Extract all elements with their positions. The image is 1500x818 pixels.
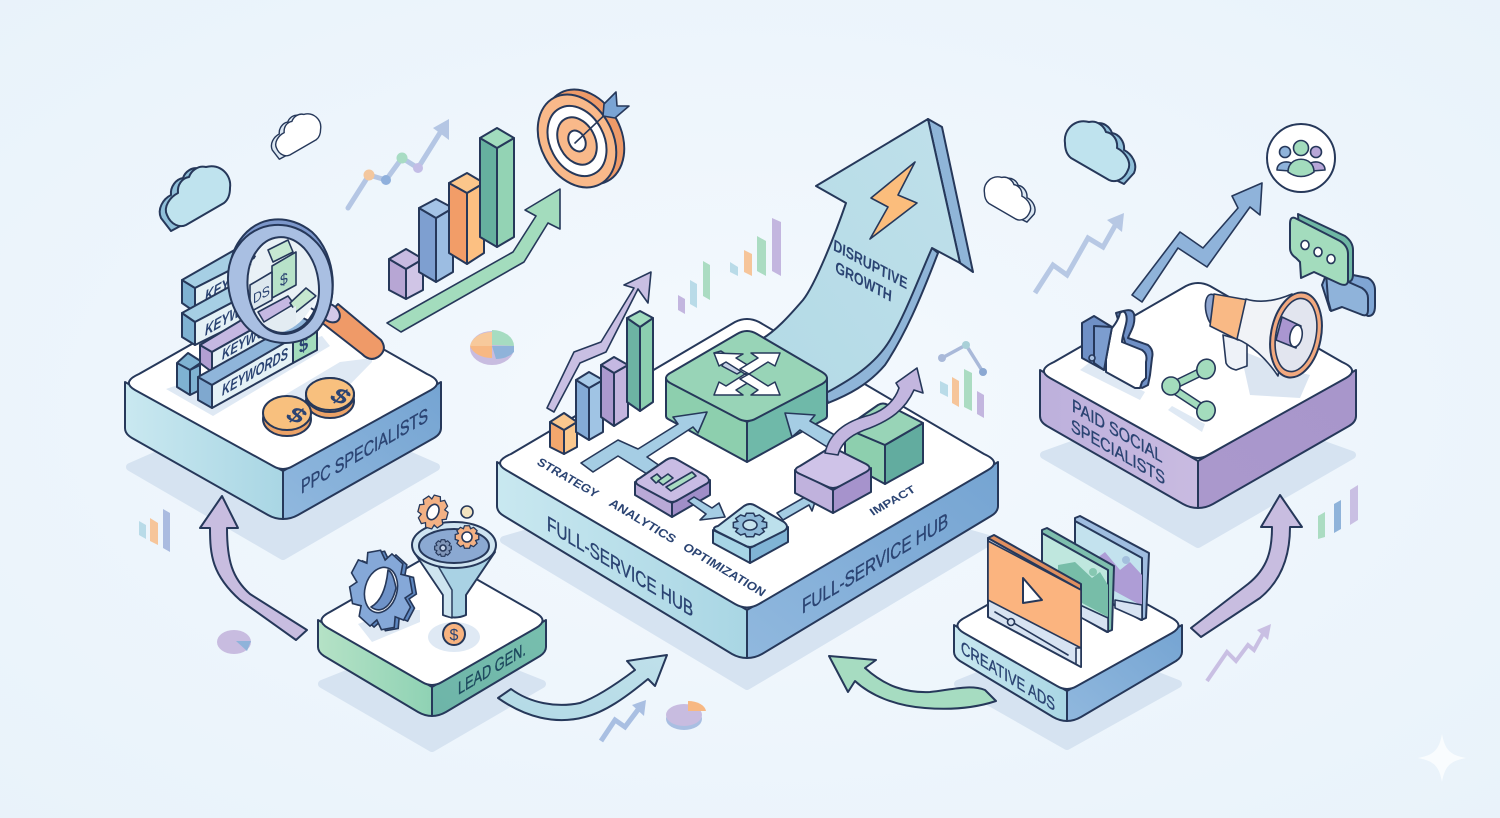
keyword block 2: KEYWORDS [205,282,275,340]
keyword block 3: KEYWORDS [222,308,290,364]
platform: lead gen [318,557,546,716]
label: PPC specialists: PPC SPECIALISTS [301,404,428,499]
magnifier ring [229,219,333,341]
label: paid social specialists: PAID SOCIAL [1072,395,1162,467]
icon: chat bubbles [1290,214,1375,316]
shadow under share icon [1168,406,1205,432]
faded mini arrow: bottom center [601,700,646,741]
label: strategy: STRATEGY [534,455,602,500]
platform: paid social specialists [1040,283,1356,508]
purple trend arrow [547,272,651,412]
icon: share nodes [1162,356,1218,424]
label: creative ads: CREATIVE ADS [961,637,1055,715]
keyword block 4: KEYWORDS [222,344,288,400]
ad panel: image middle [1042,528,1114,632]
platform: full-service hub [497,319,998,658]
arrow: creative to paid social [1191,495,1302,637]
cloud: left blue [160,166,230,231]
flow arrow: optimization to purple cube [777,493,818,520]
mini bars: left bottom [139,509,170,552]
funnel gear: orange [455,526,479,548]
megaphone bell [1263,288,1329,382]
megaphone handle [1223,335,1247,370]
megaphone back cap [1203,293,1225,329]
flow arrow: strategy to hub block [581,412,707,474]
floor shadows under platforms [130,400,1352,748]
label: full-service hub right: FULL-SERVICE HUB [802,509,948,619]
mini bars: right bottom [1318,485,1358,539]
central green routing block [666,331,827,462]
ad panel: video front [988,535,1081,667]
label: lead gen: LEAD GEN. [458,639,526,699]
icon: lightning bolt [870,162,917,239]
green bubble [1298,214,1353,282]
label: disruptive growth: GROWTH [835,259,892,306]
hub top labels [534,455,919,599]
label: optimization: OPTIMIZATION [680,540,769,599]
icon: dollar coin: $ [450,627,459,644]
pie chart: bottom center [666,701,706,730]
icon: dollar coin [443,623,465,645]
icon: gear [733,513,767,537]
platform: PPC specialists [125,295,441,519]
icon: gold coins: $ [280,402,314,428]
faded mini arrow: bottom right [1207,624,1271,681]
video slider [995,612,1068,655]
platform: creative ads [954,563,1182,721]
cloud: center white [984,177,1035,222]
ad panel: image back [1075,516,1149,620]
optimization gear block [713,504,788,563]
faded zigzag arrow [1035,213,1124,293]
keyword small block [177,353,202,395]
magnifier lens contents [248,239,317,332]
magnifier lens contents: DS [253,281,270,307]
icon: magnifying glass [228,219,384,359]
icon: gold coins [263,378,358,436]
keyword block 3 [200,298,290,372]
label: paid social specialists: SPECIALISTS [1071,415,1165,489]
faded line chart with dots, top left [348,119,449,208]
pie chart: lower left [217,630,251,654]
label: impact: IMPACT [868,484,919,518]
flow arrow: analytics to optimization [688,497,725,520]
blue zigzag arrow [1132,183,1262,302]
shadows on PPC platform top [166,336,372,418]
bar chart: rising 3D bars [389,128,514,299]
arrow: lead gen to hub [498,655,667,720]
funnel gear: grey [435,540,451,556]
icon: people circle [1267,124,1335,192]
icon: gold coins: $ [324,383,358,409]
icon: thumbs up [1080,310,1152,400]
thumb shadow [1080,362,1145,400]
shadows on lead gen top [358,610,480,652]
mini bars: center top [730,218,781,276]
keyword blocks stack [177,248,317,408]
icon: megaphone [1203,288,1329,398]
purple impact cube [795,448,871,513]
arrow: creative to hub [829,656,996,709]
disruptive growth big arrow [760,119,973,403]
label: full-service hub left: FULL-SERVICE HUB [547,512,693,622]
icon: analytics bars [651,472,696,491]
magnifier handle [321,304,384,359]
magnifier lens contents: $ [280,269,288,291]
keyword block 4 [198,318,317,408]
analytics block [635,458,710,517]
icon: target with arrow [522,75,640,201]
mini chart: right of hub [938,341,987,418]
cloud: top white [271,114,321,159]
keyword block 2 [182,282,275,345]
keyword block 4: $ [299,333,309,359]
keyword block 1: KEYWORDS [205,248,275,306]
sparkle watermark [1418,734,1466,782]
pie chart: center top [470,330,514,365]
icon: four-way arrows [714,351,780,395]
blue bubble [1322,270,1375,316]
curved purple arrow [825,368,923,455]
icon: funnel with gears [412,492,496,618]
small green block [845,404,923,484]
mini bars: left of hub arrow [678,261,710,314]
flow arrow: right side to hub block [785,413,840,450]
megaphone body [1237,294,1292,376]
arrow: lead gen to PPC [200,496,307,640]
green growth arrow to target [387,189,560,332]
hub bars chart with purple arrow [547,272,653,454]
megaphone orange band [1210,294,1248,340]
keyword block 1 [182,248,275,312]
cloud: right blue [1065,121,1135,184]
icon: large gear [344,546,422,635]
floating orange gear [414,492,452,532]
label: disruptive growth: DISRUPTIVE [833,237,908,294]
label: analytics: ANALYTICS [606,496,679,546]
play icon [1023,578,1042,603]
